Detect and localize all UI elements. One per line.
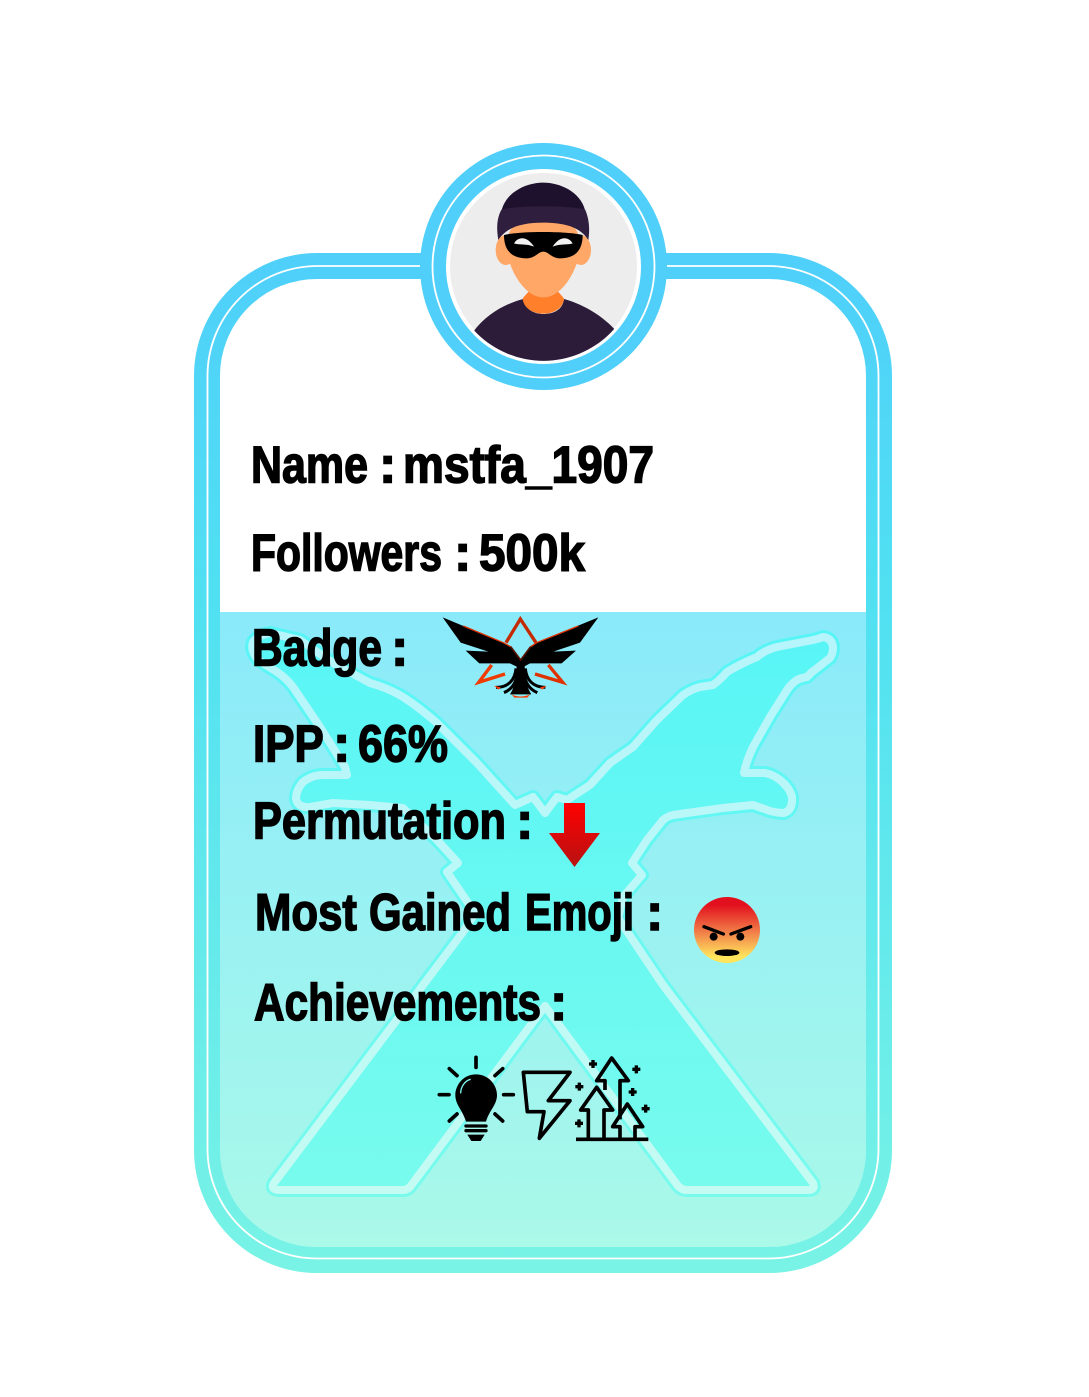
icon: light bulb — [439, 1057, 513, 1141]
text: name: : — [379, 436, 396, 494]
text: permutation: Permutation — [253, 792, 506, 850]
panel fill: lower gradient area — [220, 612, 866, 1247]
text: achievements: : — [550, 974, 567, 1032]
card panel — [207, 266, 879, 1260]
text: permutation: : — [516, 792, 533, 850]
icon: red down arrow — [549, 803, 600, 867]
text: followers: : — [454, 524, 471, 582]
text: IPP: 66% — [358, 716, 448, 774]
achievement icons — [439, 1057, 650, 1141]
text: achievements: Achievements — [254, 974, 541, 1032]
text: most gained emoji: Most — [255, 884, 357, 942]
text: badge: Badge — [252, 620, 382, 678]
text: IPP: IPP — [253, 716, 323, 774]
text: name: Name — [251, 436, 368, 494]
text: most gained emoji: : — [646, 884, 663, 942]
text: followers: Followers — [251, 524, 442, 582]
text: most gained emoji: Emoji — [525, 884, 634, 942]
text: name: mstfa_1907 — [403, 436, 654, 494]
icon: eagle badge — [443, 617, 598, 698]
text: followers: 500k — [479, 524, 585, 582]
watermark: X bird logo — [252, 633, 833, 1190]
text: most gained emoji: Gained — [369, 884, 511, 942]
avatar medallion — [420, 143, 667, 390]
text: badge: : — [391, 620, 408, 678]
card border — [207, 266, 879, 1260]
text: IPP: : — [333, 716, 350, 774]
icon: rising arrows — [575, 1058, 650, 1139]
icon: angry emoji — [694, 897, 760, 963]
icon: lightning bolt — [523, 1072, 570, 1138]
icon: masked person — [473, 183, 615, 370]
